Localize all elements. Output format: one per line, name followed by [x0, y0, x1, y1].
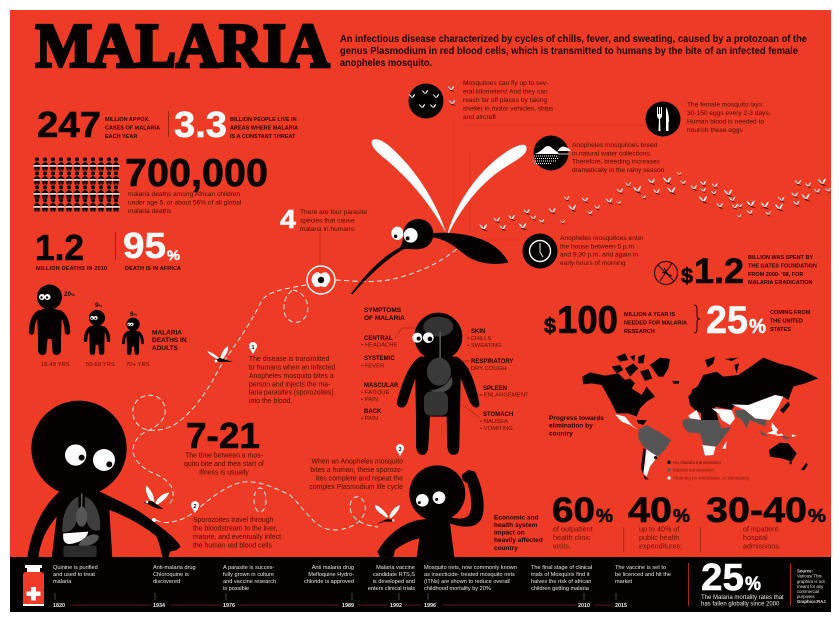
thin guide lines	[453, 119, 645, 240]
stat: 60 percent: of outpatient	[553, 524, 593, 534]
timeline events: Malaria vaccine	[376, 565, 415, 571]
stat: 40 percent: %	[673, 506, 690, 526]
text: house entry times: early hours of morning	[560, 260, 626, 267]
step 3 marker	[396, 444, 404, 456]
mosquito swarm	[479, 172, 831, 231]
text: breeding: Therefore, breeding increases	[572, 158, 661, 166]
timeline events: malaria	[53, 579, 72, 585]
brace	[694, 305, 700, 333]
timeline events: Mefloquine Hydro-	[308, 572, 354, 578]
figures: malaria deaths in adults: 20%	[64, 291, 75, 298]
timeline events: A parasite is succes-	[223, 565, 274, 571]
stat: 60 percent	[552, 491, 613, 550]
symptoms labels: • FEVER	[361, 364, 384, 370]
figures: malaria deaths in adults: 6%	[130, 311, 138, 318]
timeline events: enters clinical trials	[368, 586, 415, 592]
fact: four parasite species: species that cause	[300, 218, 355, 224]
stat: 30-40 percent: of inpatient	[743, 524, 778, 534]
stat: 60 percent: visits.	[553, 542, 571, 550]
stat: 700,000: under age 5, or about 56% of all global	[128, 200, 242, 206]
stat: 25 percent mortality decline	[688, 557, 784, 608]
text: economic impact heading: Economic and	[494, 514, 538, 522]
text: flight range: Mosquitoes can fly up to sev-	[463, 80, 548, 87]
malaria transmission regions	[638, 410, 792, 457]
timeline events: The final stage of clinical	[531, 565, 592, 571]
stat: 1.2 million deaths: MILLION DEATHS IN 2010	[36, 266, 107, 272]
timeline events: market	[615, 579, 633, 585]
stat: 60 percent: health clinic	[553, 533, 591, 542]
eyes	[412, 332, 434, 343]
timeline events: fully grown in culture	[223, 572, 274, 578]
text: progress heading: country	[549, 430, 573, 438]
fact: four parasite species: There are four parasite	[300, 209, 367, 216]
timeline events: candidate RTS,S	[373, 572, 415, 578]
timeline events	[53, 565, 671, 592]
map legend	[667, 460, 750, 481]
stat: 7-21 days	[184, 415, 264, 476]
stat: $1.2 billion: BILLION WAS SPENT BY	[748, 255, 813, 261]
head and proboscis	[351, 219, 433, 294]
timeline years: 2010	[578, 603, 590, 609]
icon grid: children	[33, 157, 120, 212]
stat: 40 percent: up to 40% of	[639, 524, 679, 534]
text: eggs: Human blood is needed to	[687, 118, 764, 126]
text: economic impact heading: health system	[494, 522, 538, 529]
stat: 25 percent mortality decline: The Malaria mortality rates that	[701, 595, 784, 601]
stat: $100 million: MILLION A YEAR IS	[624, 312, 675, 318]
stat: 700,000	[125, 152, 268, 215]
timeline events: Chloroquine is	[153, 572, 189, 578]
stat: 3.3 billion people: AREAS WHERE MALARIA	[230, 126, 298, 132]
stat: 25 percent US: STATES	[770, 327, 791, 333]
text: flight range: eral kilometers! And they can	[463, 88, 548, 96]
stat: 30-40 percent: admissions.	[743, 542, 781, 550]
timeline events: childhood mortality by 20%	[424, 586, 491, 592]
figures: malaria deaths in adults: 15-49 YRS	[41, 362, 70, 368]
timeline years: 1992	[390, 603, 402, 609]
wing: left	[372, 139, 446, 233]
timeline events: The vaccine is set to	[615, 565, 666, 571]
timeline events: be licenced and hit the	[615, 572, 671, 578]
stat: 30-40 percent: 30-40	[706, 491, 807, 530]
stat: 30-40 percent: hospital	[743, 533, 768, 542]
source note	[790, 563, 826, 606]
symptoms labels: • PAIN	[361, 397, 378, 403]
timeline events: Mosquito nets, now commonly known	[424, 565, 517, 571]
timeline events: is possible	[223, 586, 249, 592]
timeline events: Anti malaria drug	[312, 565, 354, 571]
mosquito near third human	[375, 505, 400, 524]
organs	[62, 493, 100, 557]
stat: 7-21 days: The time between a mos-	[185, 452, 263, 460]
symptoms labels: • PAIN	[361, 416, 378, 422]
text: breeding: in natural water collections.	[572, 150, 652, 158]
text: flight range: shelter in motor vehicles, ships	[463, 106, 554, 112]
timeline events: as insecticide- treated mosquito nets	[424, 572, 515, 578]
stat: $100 million: $	[544, 315, 556, 338]
symptoms labels: • HEADACHE	[361, 342, 398, 348]
stat: $100 million: RESEARCH	[624, 329, 655, 335]
source note: purposes	[797, 594, 815, 599]
symptoms labels: RESPIRATORY	[471, 359, 514, 365]
stat: 25 percent US	[706, 299, 811, 342]
title: MALARIA	[36, 12, 330, 80]
stat: $100 million	[544, 299, 687, 342]
step 1 text: laria parasites (sporozoites)	[249, 390, 334, 396]
stat: 40 percent: 40	[628, 491, 672, 530]
figure: infected human with organs	[27, 401, 181, 558]
text: house entry times: and 9:30 p.m. and again in	[560, 252, 638, 258]
text: eggs: 30-150 eggs every 2-3 days.	[687, 110, 771, 117]
island details	[767, 422, 797, 437]
symptoms labels: SKIN	[471, 329, 485, 335]
symptoms labels: • FATIQUE	[361, 390, 390, 396]
stat: 40 percent	[624, 491, 690, 552]
stat: 60 percent: 60	[552, 491, 595, 530]
text: breeding: dramatically in the rainy season	[572, 167, 665, 174]
timeline band	[10, 557, 831, 612]
planning for elimination regions	[615, 395, 783, 477]
stat: 25 percent mortality decline: %	[745, 574, 761, 595]
step 2 text: Sporozoites travel through	[193, 517, 274, 524]
text: economic impact heading: impact on	[494, 530, 525, 536]
stat: 247 million cases: CASES OF MALARIA	[105, 126, 160, 132]
timeline events: and used to treat	[53, 572, 95, 578]
source note: Various/ This	[797, 574, 822, 578]
text: eggs: The female mosquito lays	[687, 102, 763, 108]
intro text: genus Plasmodium in red blood cells, which is transmitted to humans by the bite of an infected female	[340, 46, 798, 57]
map legend: No malaria transmission	[673, 460, 722, 465]
timeline events: Quinine is purified	[53, 565, 98, 571]
step 1 text: into the blood.	[249, 398, 292, 405]
stat: $1.2 billion: THE GATES FOUNDATION	[748, 264, 817, 270]
stat: 7-21 days: quito bite and thea start of	[184, 461, 264, 468]
symptoms labels: • SWEATING	[467, 343, 502, 349]
stat: 40 percent: expenditures;	[639, 542, 682, 550]
stat: 700,000: malaria deaths among African children	[128, 191, 240, 198]
symptoms labels: SYSTEMIC	[364, 356, 395, 362]
timeline years: 1996	[424, 603, 436, 609]
stat: 25 percent mortality decline: 25	[701, 557, 744, 599]
timeline years: 1934	[153, 603, 165, 609]
timeline years: 1989	[342, 603, 354, 609]
icon: rain cloud	[533, 136, 571, 170]
step 3 text: ites complete and repeat the	[316, 476, 403, 482]
source note: graphics is not	[797, 579, 826, 584]
figures: malaria deaths in adults: ADULTS	[152, 345, 179, 352]
source note: Graphics:RAJ	[797, 599, 826, 604]
symptoms labels: BACK	[364, 409, 382, 415]
timeline events: (ITNs) are shown to reduce overall	[424, 579, 510, 585]
timeline events: discovered	[153, 579, 180, 585]
intro text: anopheles mosquito.	[340, 58, 432, 69]
large mosquito	[351, 139, 527, 294]
timeline years: 2015	[615, 603, 627, 609]
stat: 25 percent US: COMING FROM	[770, 310, 811, 316]
step 3 text: bites a human, these sporozo-	[310, 467, 403, 474]
step 1 marker	[249, 342, 257, 354]
figures: malaria deaths in adults	[32, 284, 187, 368]
symptoms labels: OF MALARIA	[364, 315, 405, 322]
stat: $1.2 billion: FROM 2000- '08, FOR	[748, 272, 803, 278]
no transmission regions	[582, 353, 818, 479]
stat: 25 percent US: %	[749, 316, 766, 338]
stat: $1.2 billion: MALARIA ERADICATION	[748, 280, 812, 286]
step 1 text: Anopheles mosquito bites a	[249, 373, 334, 380]
stat: 95%	[115, 225, 181, 272]
stat: 25 percent US: THE UNITED	[770, 318, 803, 324]
eyes	[65, 444, 115, 471]
timeline ticks and rule	[55, 593, 616, 600]
icon: no mosquito	[654, 262, 678, 284]
text: eggs: nourish these eggs	[687, 127, 743, 134]
icon: clock	[522, 234, 558, 268]
dashed infection path	[133, 248, 458, 530]
step 3 text: complex Plasmodium life cycle	[309, 484, 403, 491]
stat: 60 percent: %	[596, 506, 613, 526]
text: economic impact heading: heavily affected	[494, 537, 543, 544]
stat: $100 million: 100	[557, 299, 618, 342]
symptoms labels: • CHILLS	[467, 336, 491, 342]
symptoms labels: • ENLARGEMENT	[480, 392, 529, 398]
text: progress heading: Progress towards	[549, 415, 604, 422]
stat: 700,000: malaria deaths	[128, 208, 172, 215]
symptoms labels: • VOMITING	[480, 426, 513, 432]
stat: 3.3 billion people: BILLION PEOPLE LIVE IN	[230, 117, 297, 123]
stat: 3.3 billion people	[168, 104, 298, 145]
timeline events: chloride is approved	[304, 579, 354, 585]
symptoms labels: SPLEEN	[483, 386, 507, 392]
map legend: Planning for elimination, or eliminating	[673, 476, 750, 481]
step 3 marker: 3	[398, 447, 402, 453]
symptoms labels: STOMACH	[483, 412, 513, 418]
stat: $1.2 billion: $	[681, 265, 693, 288]
stat: 95%: 95	[123, 225, 166, 266]
timeline events: children getting malaria	[531, 586, 590, 592]
step 2 text: the bloodstream to the liver,	[193, 526, 278, 532]
stat: 30-40 percent: %	[808, 506, 826, 526]
text: flight range: and aircraft	[463, 114, 496, 121]
eyes	[391, 227, 418, 243]
fact: four parasite species: malaria in humans	[300, 226, 355, 233]
stat: $100 million: NEEDED FOR MALARIA	[624, 320, 687, 326]
abdomen	[432, 233, 508, 264]
stat: 40 percent: public health	[639, 533, 679, 542]
figures: malaria deaths in adults: 9%	[95, 302, 103, 309]
stat: 3.3 billion people: 3.3	[174, 104, 227, 145]
timeline events: Anti-malaria drug	[153, 565, 196, 571]
step 1 text: to humans when an infected	[249, 364, 335, 372]
figures: malaria deaths in adults: 50-69 YRS	[86, 362, 115, 368]
mosquito near arm	[143, 486, 169, 509]
stat: 3.3 billion people: IS A CONSTANT THREAT	[230, 134, 296, 140]
stat: 7-21 days: 7-21	[186, 415, 260, 456]
symptoms labels	[361, 307, 529, 432]
fact: four parasite species	[280, 204, 367, 234]
stat: 247 million cases: EACH YEAR	[105, 134, 137, 140]
stat: 25 percent mortality decline: has fallen globally since 2000	[701, 602, 780, 608]
fact: four parasite species: 4	[280, 204, 297, 234]
stat: 700,000: 700,000	[125, 152, 268, 195]
stat: 1.2 million deaths: 1.2	[35, 227, 84, 268]
text: house entry times: the house between 5 p.m.	[560, 244, 636, 250]
connector lines	[395, 328, 482, 418]
source note: Source:	[797, 568, 814, 574]
source note: commercial	[797, 589, 819, 594]
symptoms labels: • NAUSEA	[480, 419, 508, 425]
step 3 text: When an Anopheles mosquito	[311, 458, 403, 466]
step 1 text: person and injects the ma-	[249, 382, 330, 388]
icon: medicine bottle	[23, 565, 44, 606]
mosquito on path	[207, 346, 233, 362]
step 1 marker: 1	[252, 345, 255, 351]
stat: 25 percent US: 25	[706, 299, 748, 342]
stat: 1.2 million deaths	[35, 227, 107, 272]
organs	[423, 317, 453, 416]
world map	[582, 353, 818, 481]
step 1 text: The disease is transmitted	[249, 356, 330, 363]
timeline years: 1976	[223, 603, 235, 609]
figures: malaria deaths in adults: 70+ YRS	[126, 362, 150, 368]
text: flight range: reach far off places by taking	[463, 97, 548, 104]
stat: 7-21 days: illness is usually	[199, 470, 249, 476]
wing: right	[447, 145, 527, 236]
stat: $1.2 billion: 1.2	[694, 252, 744, 291]
figure: human scratching head	[375, 465, 484, 557]
symptoms labels: MASCULAR	[364, 383, 399, 389]
step 2 marker: 2	[194, 504, 197, 510]
text: breeding: Anopheles mosquitoes breed	[572, 142, 658, 149]
step 2 text: mature, and eventually infect	[193, 534, 281, 541]
symptoms labels: SYMPTOMS	[364, 307, 402, 314]
source note: meant for any	[797, 584, 824, 589]
stat: 247 million cases	[37, 104, 160, 145]
stat: 247 million cases: 247	[37, 104, 101, 145]
icon: flying mosquitoes	[408, 84, 456, 118]
figures: malaria deaths in adults: DEATHS IN	[152, 337, 187, 344]
text: house entry times: Anopheles mosquitoes enter	[560, 235, 644, 242]
icon: parasite cell	[307, 266, 335, 294]
eyes	[416, 491, 445, 507]
map legend: Malaria transmission	[673, 468, 715, 473]
step 2 text: the human red blood cells	[193, 542, 272, 550]
timeline events: halves the risk of african	[531, 579, 591, 585]
symptoms labels: • DRY COUGH	[467, 366, 506, 372]
symptoms labels: CENTRAL	[364, 336, 393, 342]
stat: 247 million cases: MILLION APPOX.	[105, 117, 150, 123]
stat: $1.2 billion	[681, 252, 817, 291]
icon: fork and knife	[646, 102, 680, 136]
text: progress heading: elimination by	[549, 422, 593, 430]
timeline years: 1820	[53, 603, 65, 609]
step 2 marker	[191, 501, 199, 513]
figure: symptoms body	[397, 313, 479, 455]
text: economic impact heading: country	[494, 545, 518, 552]
timeline events: is developed and	[373, 579, 415, 585]
stat: 95%: DEATH IS IN AFRICA	[125, 266, 181, 272]
figures: malaria deaths in adults: MALARIA	[152, 330, 182, 336]
timeline events: trials of Mosquirix find it	[531, 572, 590, 578]
timeline events: and vaccine research	[223, 579, 276, 585]
stat: 30-40 percent	[700, 491, 826, 552]
stat: 95%: %	[167, 247, 181, 263]
